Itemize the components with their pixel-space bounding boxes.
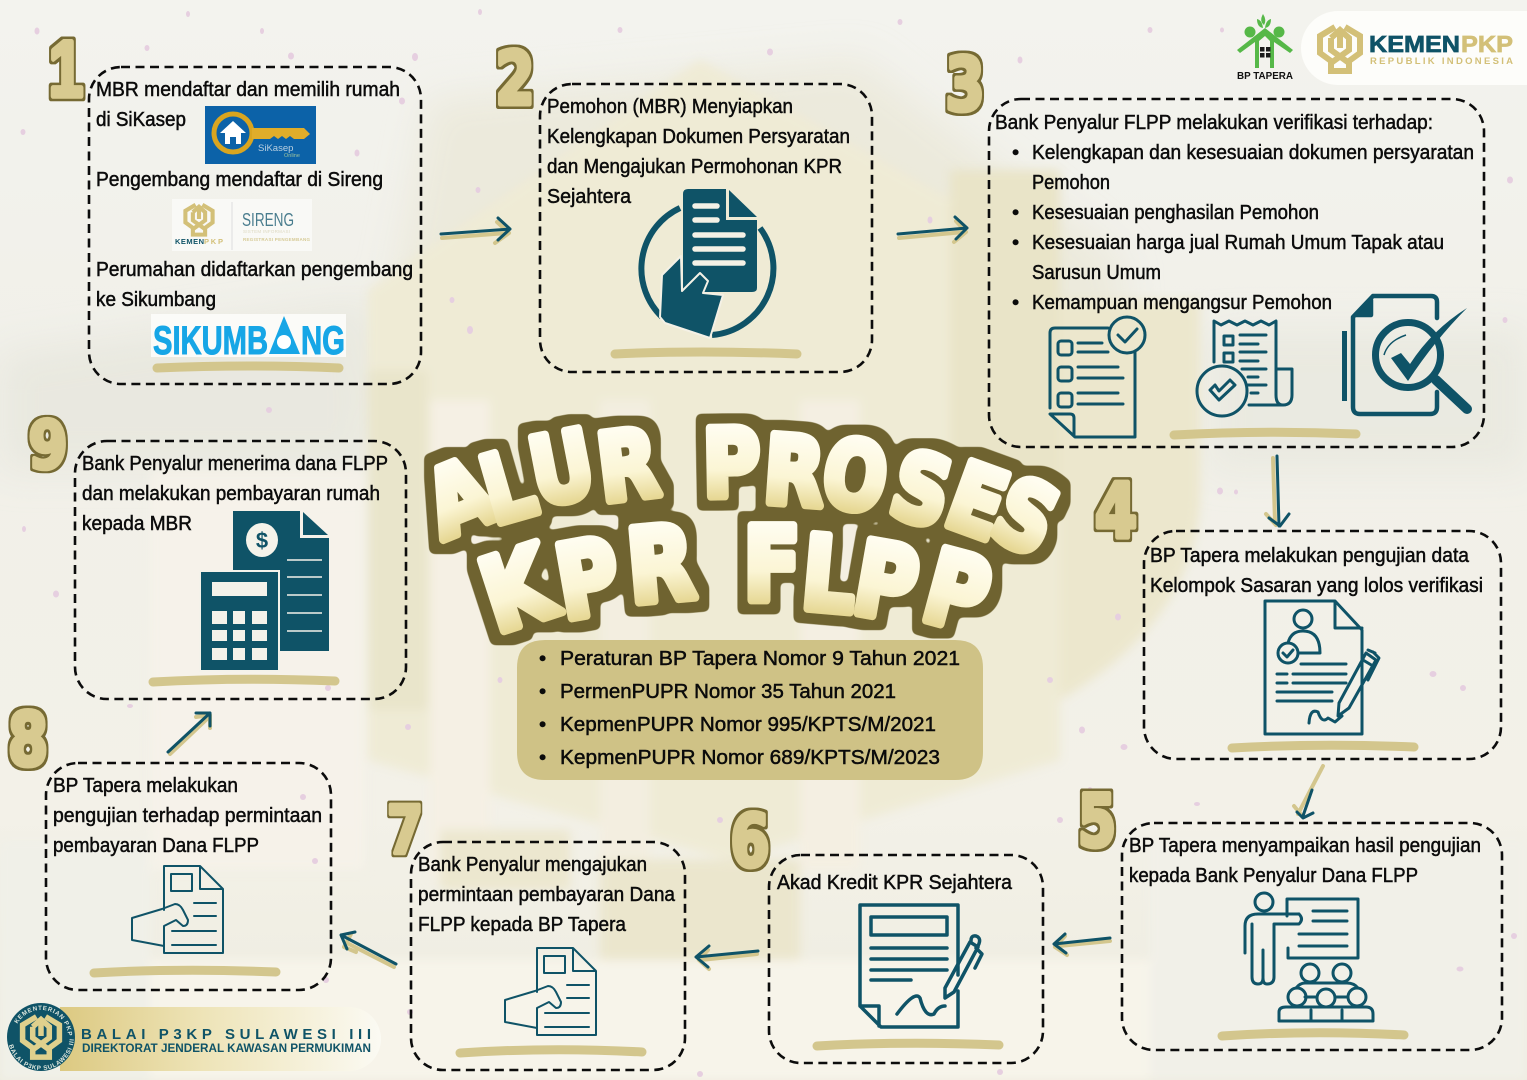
step 1 panel: Perumahan didaftarkan pengembang — [96, 258, 413, 281]
icon: hand holding document — [641, 189, 773, 338]
step 3 panel: Kemampuan mengangsur Pemohon — [1032, 291, 1332, 314]
number 2: 2 — [495, 37, 535, 122]
arrow 4 to 5 — [1294, 766, 1323, 818]
title: Alur Proses KPR FLPP: L — [470, 429, 547, 547]
icon: document and calculator: $ — [256, 528, 268, 553]
Sireng logo: REGISTRASI PENGEMBANG — [243, 237, 310, 242]
step 7 panel: Bank Penyalur mengajukan — [418, 853, 647, 876]
arrow 3 to 4 — [1266, 456, 1289, 526]
panel: legal references: PermenPUPR Nomor 35 Tahun 2021 — [560, 680, 896, 703]
step 2 panel: Kelengkapan Dokumen Persyaratan — [547, 125, 850, 148]
Sireng logo: SIRENG — [242, 210, 294, 230]
title: Alur Proses KPR FLPP: P — [702, 410, 761, 519]
Sireng logo: PKP — [204, 237, 223, 246]
step 5 panel — [1078, 781, 1502, 1050]
SiKasep logo: Online — [284, 153, 300, 159]
step 5 panel: kepada Bank Penyalur Dana FLPP — [1129, 864, 1418, 887]
step 9 panel: kepada MBR — [82, 512, 192, 535]
step 7 panel — [387, 793, 685, 1070]
title: Alur Proses KPR FLPP: P — [845, 519, 927, 647]
icon: document and calculator — [199, 511, 329, 672]
title: Alur Proses KPR FLPP: F — [743, 506, 801, 625]
step 3 panel: • — [1012, 201, 1019, 224]
footer badge: Balai P3KP Sulawesi III — [7, 1003, 381, 1071]
footer badge: Balai P3KP Sulawesi III: KEMENTERIAN PKP — [14, 1006, 72, 1036]
icon: document under magnifier — [1342, 296, 1467, 414]
number 9: 9 — [28, 408, 68, 484]
step 3 panel — [945, 43, 1484, 447]
panel: legal references: • — [539, 746, 546, 769]
number 4: 4 — [1095, 469, 1137, 556]
panel: legal references: • — [539, 647, 546, 670]
number 8: 8 — [8, 697, 48, 783]
icon: hand with form — [505, 948, 596, 1035]
step 2 panel — [495, 37, 872, 372]
panel: legal references: • — [539, 680, 546, 703]
number 7: 7 — [387, 793, 423, 870]
number 5: 5 — [1078, 781, 1116, 864]
arrow 5 to 6 — [1054, 934, 1110, 955]
arrow 1 to 2 — [441, 218, 510, 243]
step 1 panel: MBR mendaftar dan memilih rumah — [96, 78, 400, 101]
title: Alur Proses KPR FLPP: O — [816, 418, 895, 535]
panel: legal references — [517, 640, 983, 780]
step 9 panel — [28, 408, 406, 699]
SiKasep logo: SiKasep — [258, 143, 293, 154]
arrow 7 to 8 — [341, 932, 396, 967]
footer badge: Balai P3KP Sulawesi III: BALAI P3KP SULAWESI III — [81, 1026, 371, 1043]
panel: legal references: KepmenPUPR Nomor 689/KPTS/M/2023 — [560, 746, 940, 769]
title: Alur Proses KPR FLPP: A — [410, 435, 510, 561]
arrow 8 to 9 — [168, 713, 210, 754]
icon: presenter and audience — [1245, 893, 1373, 1021]
icon: checklist — [1050, 317, 1145, 437]
step 3 panel: Pemohon — [1032, 171, 1110, 194]
logo: Kemen PKP pill: REPUBLIK INDONESIA — [1370, 56, 1513, 67]
step 4 panel — [1095, 469, 1501, 759]
panel: legal references: Peraturan BP Tapera Nomor 9 Tahun 2021 — [560, 647, 960, 670]
logo: Kemen PKP pill — [1301, 11, 1527, 85]
step 4 panel: BP Tapera melakukan pengujian data — [1150, 544, 1470, 567]
logo: BP Tapera: BP TAPERA — [1237, 71, 1293, 82]
title: Alur Proses KPR FLPP: R — [592, 409, 665, 524]
step 3 panel: Sarusun Umum — [1032, 261, 1161, 284]
step 8 panel: pembayaran Dana FLPP — [53, 834, 259, 857]
step 8 panel: pengujian terhadap permintaan — [53, 804, 322, 827]
icon: signed contract — [860, 905, 982, 1027]
step 6 panel: Akad Kredit KPR Sejahtera — [777, 871, 1013, 894]
panel: legal references: • — [539, 713, 546, 736]
step 3 panel: • — [1012, 231, 1019, 254]
step 1 panel: ke Sikumbang — [96, 288, 216, 311]
title: Alur Proses KPR FLPP: U — [521, 410, 603, 529]
step 6 panel — [730, 800, 1043, 1063]
title: Alur Proses KPR FLPP: K — [467, 523, 571, 657]
step 8 panel: BP Tapera melakukan — [53, 774, 238, 797]
step 2 panel: Pemohon (MBR) Menyiapkan — [547, 95, 793, 118]
Sikumbang logo: SIKUMB — [153, 319, 268, 363]
step 3 panel: Kesesuaian harga jual Rumah Umum Tapak atau — [1032, 231, 1444, 254]
Sireng logo: SISTEM INFORMASI — [243, 229, 290, 234]
step 1 panel — [49, 24, 421, 384]
logo: Kemen PKP pill: KEMEN — [1369, 31, 1460, 57]
step 2 panel: dan Mengajukan Permohonan KPR — [547, 155, 842, 178]
step 3 panel: Kesesuaian penghasilan Pemohon — [1032, 201, 1319, 224]
icon: hand with form — [132, 866, 223, 953]
step 8 panel — [8, 697, 331, 990]
title: Alur Proses KPR FLPP: S — [880, 431, 962, 550]
arrow 6 to 7 — [696, 946, 758, 969]
Sikumbang logo: NG — [301, 319, 345, 363]
title: Alur Proses KPR FLPP: E — [933, 442, 1020, 563]
Sireng logo — [172, 199, 312, 251]
step 4 panel: Kelompok Sasaran yang lolos verifikasi — [1150, 574, 1483, 597]
panel: legal references: KepmenPUPR Nomor 995/KPTS/M/2021 — [560, 713, 936, 736]
title: Alur Proses KPR FLPP: L — [797, 514, 861, 637]
title: Alur Proses KPR FLPP — [410, 409, 1074, 658]
step 1 panel: di SiKasep — [96, 108, 186, 131]
logo: Kemen PKP pill: PKP — [1461, 31, 1513, 57]
title: Alur Proses KPR FLPP: P — [547, 516, 629, 644]
step 9 panel: dan melakukan pembayaran rumah — [82, 482, 380, 505]
arrow 2 to 3 — [898, 217, 967, 242]
step 3 panel: Bank Penyalur FLPP melakukan verifikasi terhadap: — [995, 111, 1433, 134]
step 9 panel: Bank Penyalur menerima dana FLPP — [82, 452, 388, 475]
number 1: 1 — [49, 24, 83, 113]
Sireng logo: KEMEN — [175, 237, 204, 246]
number 6: 6 — [730, 800, 770, 884]
step 1 panel: Pengembang mendaftar di Sireng — [96, 168, 383, 191]
step 7 panel: FLPP kepada BP Tapera — [418, 913, 627, 936]
SiKasep logo — [205, 106, 316, 164]
step 7 panel: permintaan pembayaran Dana — [418, 883, 676, 906]
title: Alur Proses KPR FLPP: P — [912, 527, 1002, 658]
footer badge: Balai P3KP Sulawesi III: DIREKTORAT JENDERAL KAWASAN PERMUKIMAN — [82, 1043, 371, 1055]
step 2 panel: Sejahtera — [547, 185, 632, 208]
title: Alur Proses KPR FLPP: S — [977, 456, 1074, 579]
icon: receipt with check — [1197, 321, 1292, 416]
icon: signed document with person — [1265, 601, 1379, 734]
footer badge: Balai P3KP Sulawesi III: BALAI P3KP SULAWESI III — [9, 1039, 74, 1070]
logo: BP Tapera — [1237, 14, 1293, 82]
step 3 panel: • — [1012, 291, 1019, 314]
step 3 panel: Kelengkapan dan kesesuaian dokumen persyaratan — [1032, 141, 1474, 164]
title: Alur Proses KPR FLPP: R — [622, 504, 700, 628]
title: Alur Proses KPR FLPP: R — [760, 416, 828, 529]
step 5 panel: BP Tapera menyampaikan hasil pengujian — [1129, 834, 1481, 857]
number 3: 3 — [945, 43, 985, 128]
step 3 panel: • — [1012, 141, 1019, 164]
